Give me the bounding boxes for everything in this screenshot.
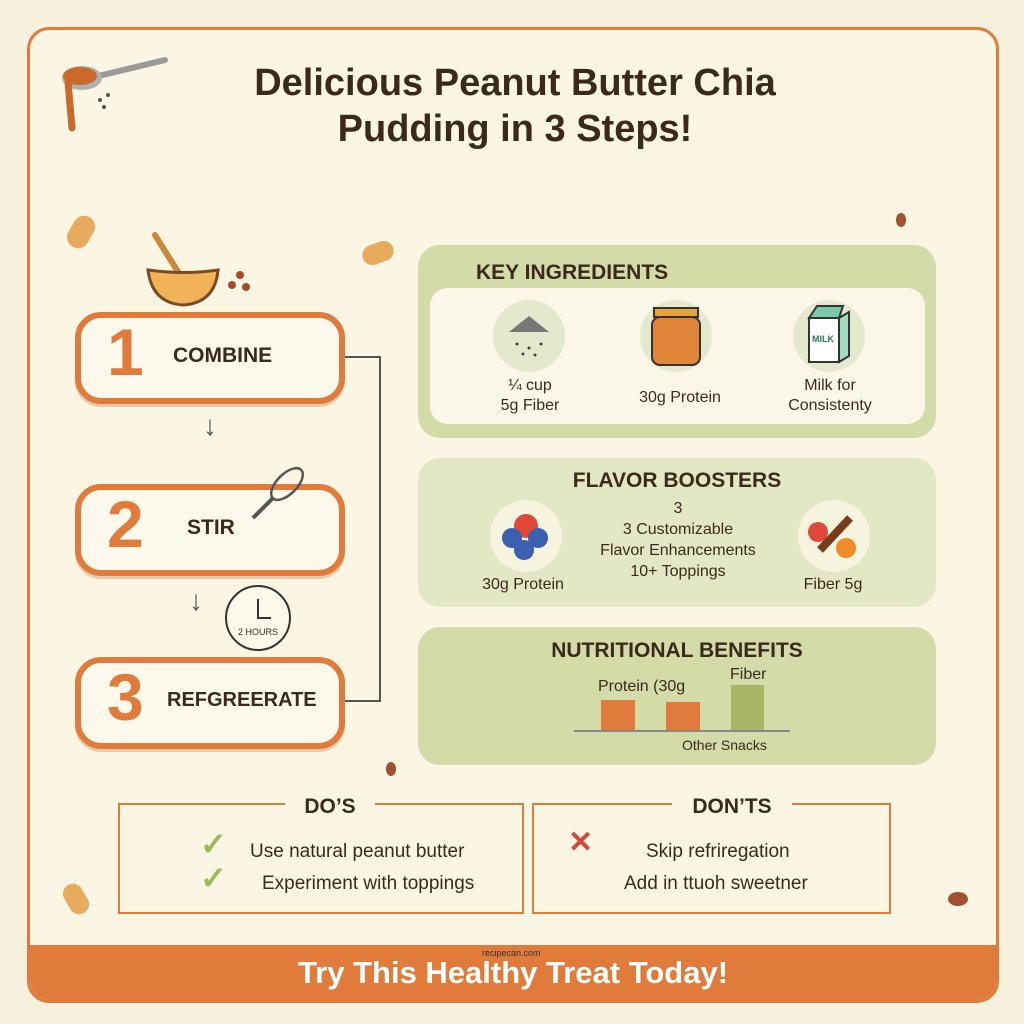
step 3: 3 [107, 660, 144, 734]
heading: do's: DO’S [304, 795, 356, 818]
icon: clock [225, 585, 291, 651]
panel: key ingredients [418, 245, 936, 438]
bar chart [574, 666, 790, 753]
connector line [345, 356, 381, 702]
panel: don'ts: Skip refriregation [646, 841, 790, 862]
panel: do's: Experiment with toppings [262, 873, 474, 894]
icon: bowl [146, 232, 250, 306]
panel: don'ts: Add in ttuoh sweetner [624, 873, 808, 894]
center text: 3 Customizable [623, 521, 733, 538]
panel: flavor boosters [418, 458, 936, 607]
footer text: Try This Healthy Treat Today! [298, 955, 728, 990]
step 1 [75, 312, 345, 404]
label: berries: 30g Protein [482, 576, 564, 593]
footer banner [30, 945, 996, 1000]
center text: Flavor Enhancements [600, 542, 756, 559]
step 3 [75, 657, 345, 749]
label: milk: Consistenty [788, 397, 872, 414]
icon: cinnamon [798, 500, 870, 572]
step 2 [75, 484, 345, 576]
watermark: recipecan.com [482, 948, 541, 958]
icon: milk: MILK [812, 334, 834, 344]
panel: don'ts: ✕ [568, 826, 593, 859]
label: chia [501, 377, 560, 414]
title [254, 62, 776, 150]
step 3: REFGREERATE [167, 689, 317, 711]
step 1: 1 [107, 315, 144, 389]
icon: spoon with peanut butter [62, 57, 168, 132]
bar chart: Fiber [730, 666, 766, 683]
panel: key ingredients: KEY INGREDIENTS [476, 261, 668, 284]
panel: do's [118, 803, 524, 914]
step 2: STIR [187, 516, 235, 539]
label: jar: 30g Protein [639, 389, 721, 406]
ingredients inner card [430, 288, 925, 424]
panel: do's: Use natural peanut butter [250, 841, 464, 862]
heading: do's [285, 795, 375, 819]
label: chia: 5g Fiber [501, 397, 559, 414]
step 2: 2 [107, 487, 144, 561]
arrow 1: ↓ [203, 410, 217, 441]
panel: don'ts [532, 803, 891, 914]
label: milk [788, 377, 872, 414]
title: Pudding in 3 Steps! [338, 108, 692, 150]
panel: flavor boosters: FLAVOR BOOSTERS [573, 469, 781, 492]
panel: do's: ✓ [200, 860, 227, 896]
label: milk: Milk for [804, 377, 856, 394]
label: cinnamon: Fiber 5g [804, 576, 862, 593]
center text: 3 [674, 500, 682, 517]
icon: milk [793, 300, 865, 372]
icon: clock: 2 HOURS [238, 627, 278, 637]
bar chart: Other Snacks [682, 737, 767, 753]
panel: nutritional benefits: NUTRITIONAL BENEFITS [551, 639, 803, 662]
heading: don'ts: DON’TS [692, 795, 772, 818]
decorative peanuts [63, 212, 99, 252]
panel: nutritional benefits [418, 627, 936, 765]
title: Delicious Peanut Butter Chia [254, 62, 776, 104]
icon: whisk [252, 466, 304, 520]
icon: berries [490, 500, 562, 572]
panel: do's: ✓ [200, 826, 227, 862]
icon: jar [640, 300, 712, 372]
label: chia: ¼ cup [508, 377, 552, 394]
arrow 2: ↓ [189, 585, 203, 616]
step 1: COMBINE [173, 344, 272, 367]
bar chart: Protein (30g [598, 678, 685, 695]
center text: 10+ Toppings [630, 563, 726, 580]
center text [600, 500, 756, 580]
icon: chia [493, 300, 565, 372]
heading: don'ts [672, 795, 792, 819]
